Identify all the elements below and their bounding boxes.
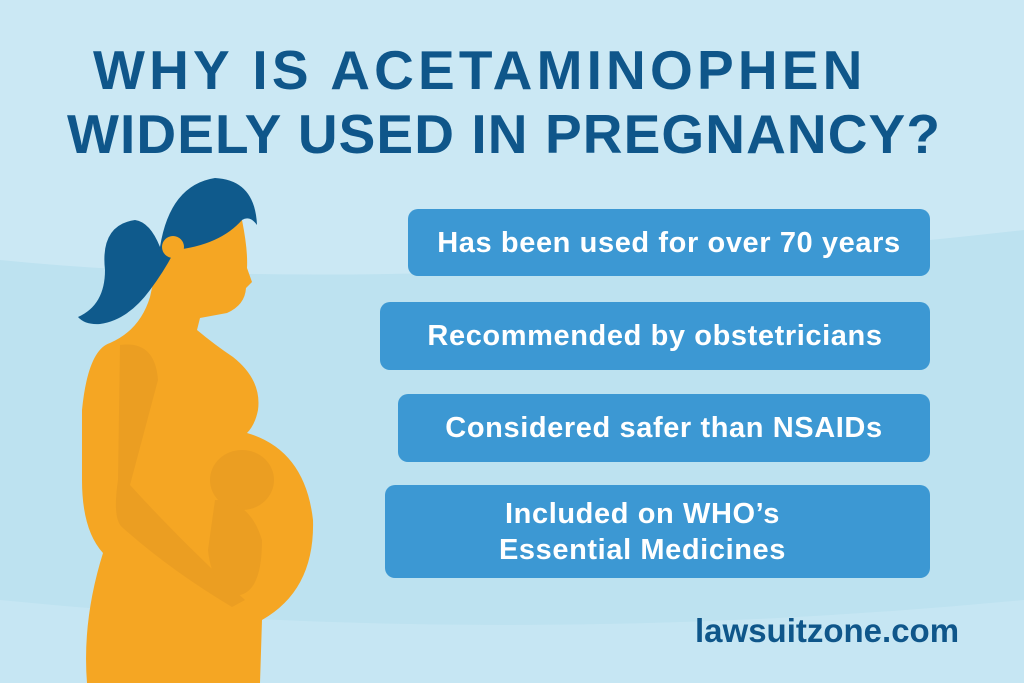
box 3: Considered safer than NSAIDs [445, 412, 883, 444]
box 2: Recommended by obstetricians [427, 320, 883, 352]
title: WHY IS ACETAMINOPHEN [93, 39, 867, 101]
arm [116, 344, 245, 607]
box 4 [385, 485, 930, 578]
box 3 [398, 394, 930, 462]
box 4: Essential Medicines [499, 534, 786, 566]
footer url: lawsuitzone.com [695, 612, 959, 649]
title [67, 39, 941, 165]
box 4: Included on WHO’s [505, 498, 780, 530]
illustration: pregnant woman [78, 178, 314, 683]
hair [78, 178, 257, 324]
baby [210, 450, 274, 510]
box 1 [408, 209, 930, 276]
title: WIDELY USED IN PREGNANCY? [67, 103, 941, 165]
box 2 [380, 302, 930, 370]
box 1: Has been used for over 70 years [437, 226, 901, 258]
